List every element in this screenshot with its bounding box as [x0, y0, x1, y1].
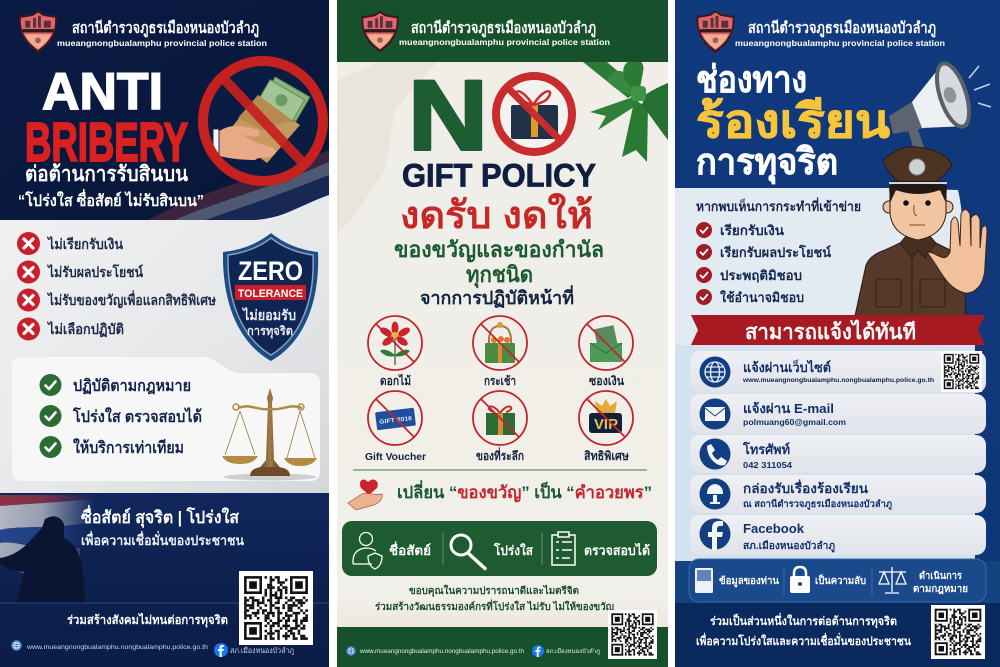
heading line 1: ช่องทาง: [696, 59, 807, 100]
channel: facebook: [690, 515, 986, 555]
banner: สามารถแจ้งได้ทันที: [745, 319, 916, 344]
subheading line 3: จากการปฏิบัติหน้าที่: [420, 285, 574, 308]
zero tolerance shield: ไม่ยอมรับ: [241, 306, 296, 323]
label: flower: ดอกไม้: [380, 373, 411, 388]
cap: [883, 147, 952, 182]
slogan: เปลี่ยน “ของขวัญ” เป็น “คำอวยพร”: [397, 480, 652, 503]
commitment 2: โปร่งใส ตรวจสอบได้: [72, 406, 202, 426]
value 3: ตรวจสอบได้: [584, 542, 650, 558]
assurance 2: เป็นความลับ: [815, 573, 866, 587]
website: [346, 646, 524, 656]
icon: document: [695, 568, 713, 593]
flag stripes: [145, 150, 329, 222]
heading line 3: การทุจริต: [696, 141, 838, 185]
commitment 2: [40, 405, 202, 427]
label: gift voucher: Gift Voucher: [365, 451, 426, 463]
saluting silhouette: [0, 516, 86, 603]
channel: complaint box: กล่องรับเรื่องร้องเรียน: [743, 479, 868, 496]
value 2: โปร่งใส: [493, 542, 533, 558]
channel: phone: 042 311054: [743, 461, 793, 470]
item 1: [17, 232, 123, 255]
icon: clipboard: [552, 532, 575, 565]
item 3: ไม่รับของขวัญเพื่อแลกสิทธิพิเศษ: [46, 290, 216, 309]
facebook: สภ.เมืองหนองบัวลำภู: [546, 647, 600, 655]
channel: website: [690, 351, 986, 393]
heading N: N: [408, 60, 488, 170]
behaviour 1: เรียกรับเงิน: [720, 223, 784, 238]
zero tolerance shield: การทุจริต: [247, 324, 293, 339]
assurance 3: ดำเนินการ: [919, 570, 963, 582]
subheading line 2: ทุกชนิด: [466, 262, 533, 289]
commitment 3: ให้บริการเท่าเทียม: [73, 438, 184, 457]
facebook: สภ.เมืองหนองบัวลำภู: [230, 646, 294, 655]
channel: email: แจ้งผ่าน E-mail: [743, 401, 834, 416]
red thai heading: งดรับ งดให้: [400, 193, 593, 237]
footer band: [337, 627, 668, 667]
facebook: [214, 643, 294, 657]
subheading line 1: ของขวัญและของกำนัล: [394, 237, 604, 263]
station name english: mueangnongbualamphu provincial police station: [399, 38, 610, 47]
icon: flower: [368, 316, 422, 370]
qr code: [941, 351, 982, 392]
heading BRIBERY: BRIBERY: [25, 111, 188, 173]
list: prohibited behaviours: [17, 232, 216, 340]
bottom band: [675, 603, 1000, 667]
officer illustration: [855, 147, 987, 316]
panel: anti bribery: [0, 0, 329, 667]
slogan: “โปร่งใส ซื่อสัตย์ ไม่รับสินบน”: [18, 189, 204, 210]
icon: megaphone: [889, 60, 991, 150]
marble texture: [337, 62, 437, 235]
panel background blue: [675, 0, 1000, 667]
station name: สถานีตำรวจภูธรเมืองหนองบัวลำภู: [411, 19, 596, 39]
icon: souvenir: [473, 391, 527, 445]
zero tolerance shield: ZERO: [238, 256, 303, 286]
label: basket: กระเช้า: [484, 374, 516, 388]
bottom section: [0, 493, 329, 667]
channel: facebook: Facebook: [743, 521, 805, 536]
channel: email: [690, 394, 986, 434]
flag corner: [0, 495, 92, 573]
icon: prohibited bribe: [198, 56, 328, 186]
channel: complaint box: [690, 475, 986, 513]
station name english: mueangnongbualamphu provincial police station: [57, 39, 267, 48]
values bar: [342, 521, 657, 576]
icon: vip: [579, 391, 633, 445]
icon: hands with heart: [348, 480, 382, 510]
panel: complaint channels: [675, 0, 1000, 667]
card: commitments: [12, 357, 320, 481]
lower light tint: [675, 345, 975, 562]
qr code: [608, 610, 657, 659]
ribbon and bow: [583, 60, 668, 162]
icon: gift voucher: [368, 391, 422, 445]
panel: no gift policy: [337, 0, 668, 667]
grey middle section: [0, 195, 329, 493]
face: [883, 201, 895, 213]
commitment 1: [40, 374, 191, 396]
uniform: [855, 243, 966, 316]
channel: phone: [690, 435, 986, 473]
station crest: [19, 10, 57, 53]
station name: สถานีตำรวจภูธรเมืองหนองบัวลำภู: [748, 19, 936, 39]
commitment 1: ปฏิบัติตามกฎหมาย: [73, 377, 191, 395]
text: if you see: หากพบเห็นการกระทำที่เข้าข่าย: [696, 197, 861, 214]
assurance 1: ข้อมูลของท่าน: [719, 575, 779, 588]
list: behaviours: [696, 222, 831, 305]
item 3: [17, 288, 216, 312]
website: [11, 640, 208, 651]
qr code: [239, 571, 313, 645]
label: souvenir: ของที่ระลึก: [476, 447, 524, 463]
banner: [691, 315, 985, 345]
item 4: [17, 318, 124, 340]
icon: magnifier: [451, 535, 487, 569]
item 2: ไม่รับผลประโยชน์: [46, 263, 143, 280]
website: www.mueangnongbualamphu.nongbualamphu.police.go.th: [26, 644, 208, 651]
heading gift policy: GIFT POLICY: [402, 158, 596, 194]
icon: padlock: [790, 567, 810, 593]
qr code: [931, 605, 985, 659]
label: vip: สิทธิพิเศษ: [584, 449, 629, 463]
icon: scales of justice: [222, 388, 317, 480]
icon: person with shield: [353, 532, 382, 569]
facebook: [532, 645, 600, 657]
header band: [337, 0, 668, 62]
station crest: [361, 11, 399, 52]
channel: facebook: สภ.เมืองหนองบัวลำภู: [743, 540, 835, 553]
channel: complaint box: ณ สถานีตำรวจภูธรเมืองหนองบัวลำภู: [743, 498, 892, 511]
item 2: [17, 260, 143, 284]
call to action: ร่วมสร้างสังคมไม่ทนต่อการทุจริต: [67, 612, 228, 628]
light section: [675, 188, 975, 562]
closing line 2: เพื่อความโปร่งใสและความเชื่อมั่นของประชาชน: [696, 632, 911, 648]
item 4: ไม่เลือกปฏิบัติ: [46, 320, 124, 338]
commitment 3: [40, 436, 184, 458]
channel: website: แจ้งผ่านเว็บไซต์: [743, 358, 831, 375]
assurance 3 line 2: ตามกฎหมาย: [913, 584, 968, 595]
panel background navy: [0, 0, 329, 222]
icon: vip: VIP: [594, 416, 618, 433]
raised hand: [927, 210, 987, 293]
channel: email: polmuang60@gmail.com: [743, 418, 846, 427]
behaviour 3: ประพฤติมิชอบ: [720, 268, 802, 283]
icon: no gift: [496, 76, 572, 152]
behaviour 4: ใช้อำนาจมิชอบ: [720, 289, 804, 305]
zero tolerance shield: [223, 233, 318, 361]
assurance bar: [675, 559, 1000, 605]
panel background cream: [337, 0, 668, 667]
icon: gift voucher: GIFT 2016: [379, 416, 413, 426]
label: money envelope: ซองเงิน: [589, 374, 625, 388]
zero tolerance shield: TOLERANCE: [238, 288, 303, 300]
station name english: mueangnongbualamphu provincial police station: [735, 39, 945, 48]
heading ANTI: ANTI: [42, 63, 163, 121]
value 1: ชื่อสัตย์: [389, 541, 431, 558]
list: commitments: [40, 374, 202, 458]
icon: scales: [879, 567, 906, 593]
motto line 2: เพื่อความเชื่อมั่นของประชาชน: [81, 530, 245, 548]
icon: money envelope: [579, 316, 633, 370]
behaviour 2: เรียกรับผลประโยชน์: [720, 244, 831, 260]
thanks line 1: ขอบคุณในความปรารถนาดีและไมตรีจิต: [409, 584, 579, 597]
website: www.mueangnongbualamphu.nongbualamphu.police.go.th: [359, 649, 524, 655]
station name: สถานีตำรวจภูธรเมืองหนองบัวลำภู: [72, 19, 259, 39]
thanks line 2: ร่วมสร้างวัฒนธรรมองค์กรที่โปร่งใส ไม่รับ ไม่ให้ของขวัญ: [375, 599, 614, 613]
item 1: ไม่เรียกรับเงิน: [46, 235, 123, 252]
heading line 2: ร้องเรียน: [696, 95, 891, 147]
thai subheading: ต่อต้านการรับสินบน: [25, 162, 189, 186]
channel: phone: โทรศัพท์: [742, 441, 790, 457]
closing line 1: ร่วมเป็นส่วนหนึ่งในการต่อต้านการทุจริต: [710, 612, 897, 629]
station crest: [696, 10, 735, 53]
motto: ซื่อสัตย์ สุจริต | โปร่งใส: [81, 505, 240, 528]
channel: website: www.mueangnongbualamphu.nongbualamphu.police.go.th: [742, 377, 934, 384]
icon: basket: [473, 316, 527, 370]
